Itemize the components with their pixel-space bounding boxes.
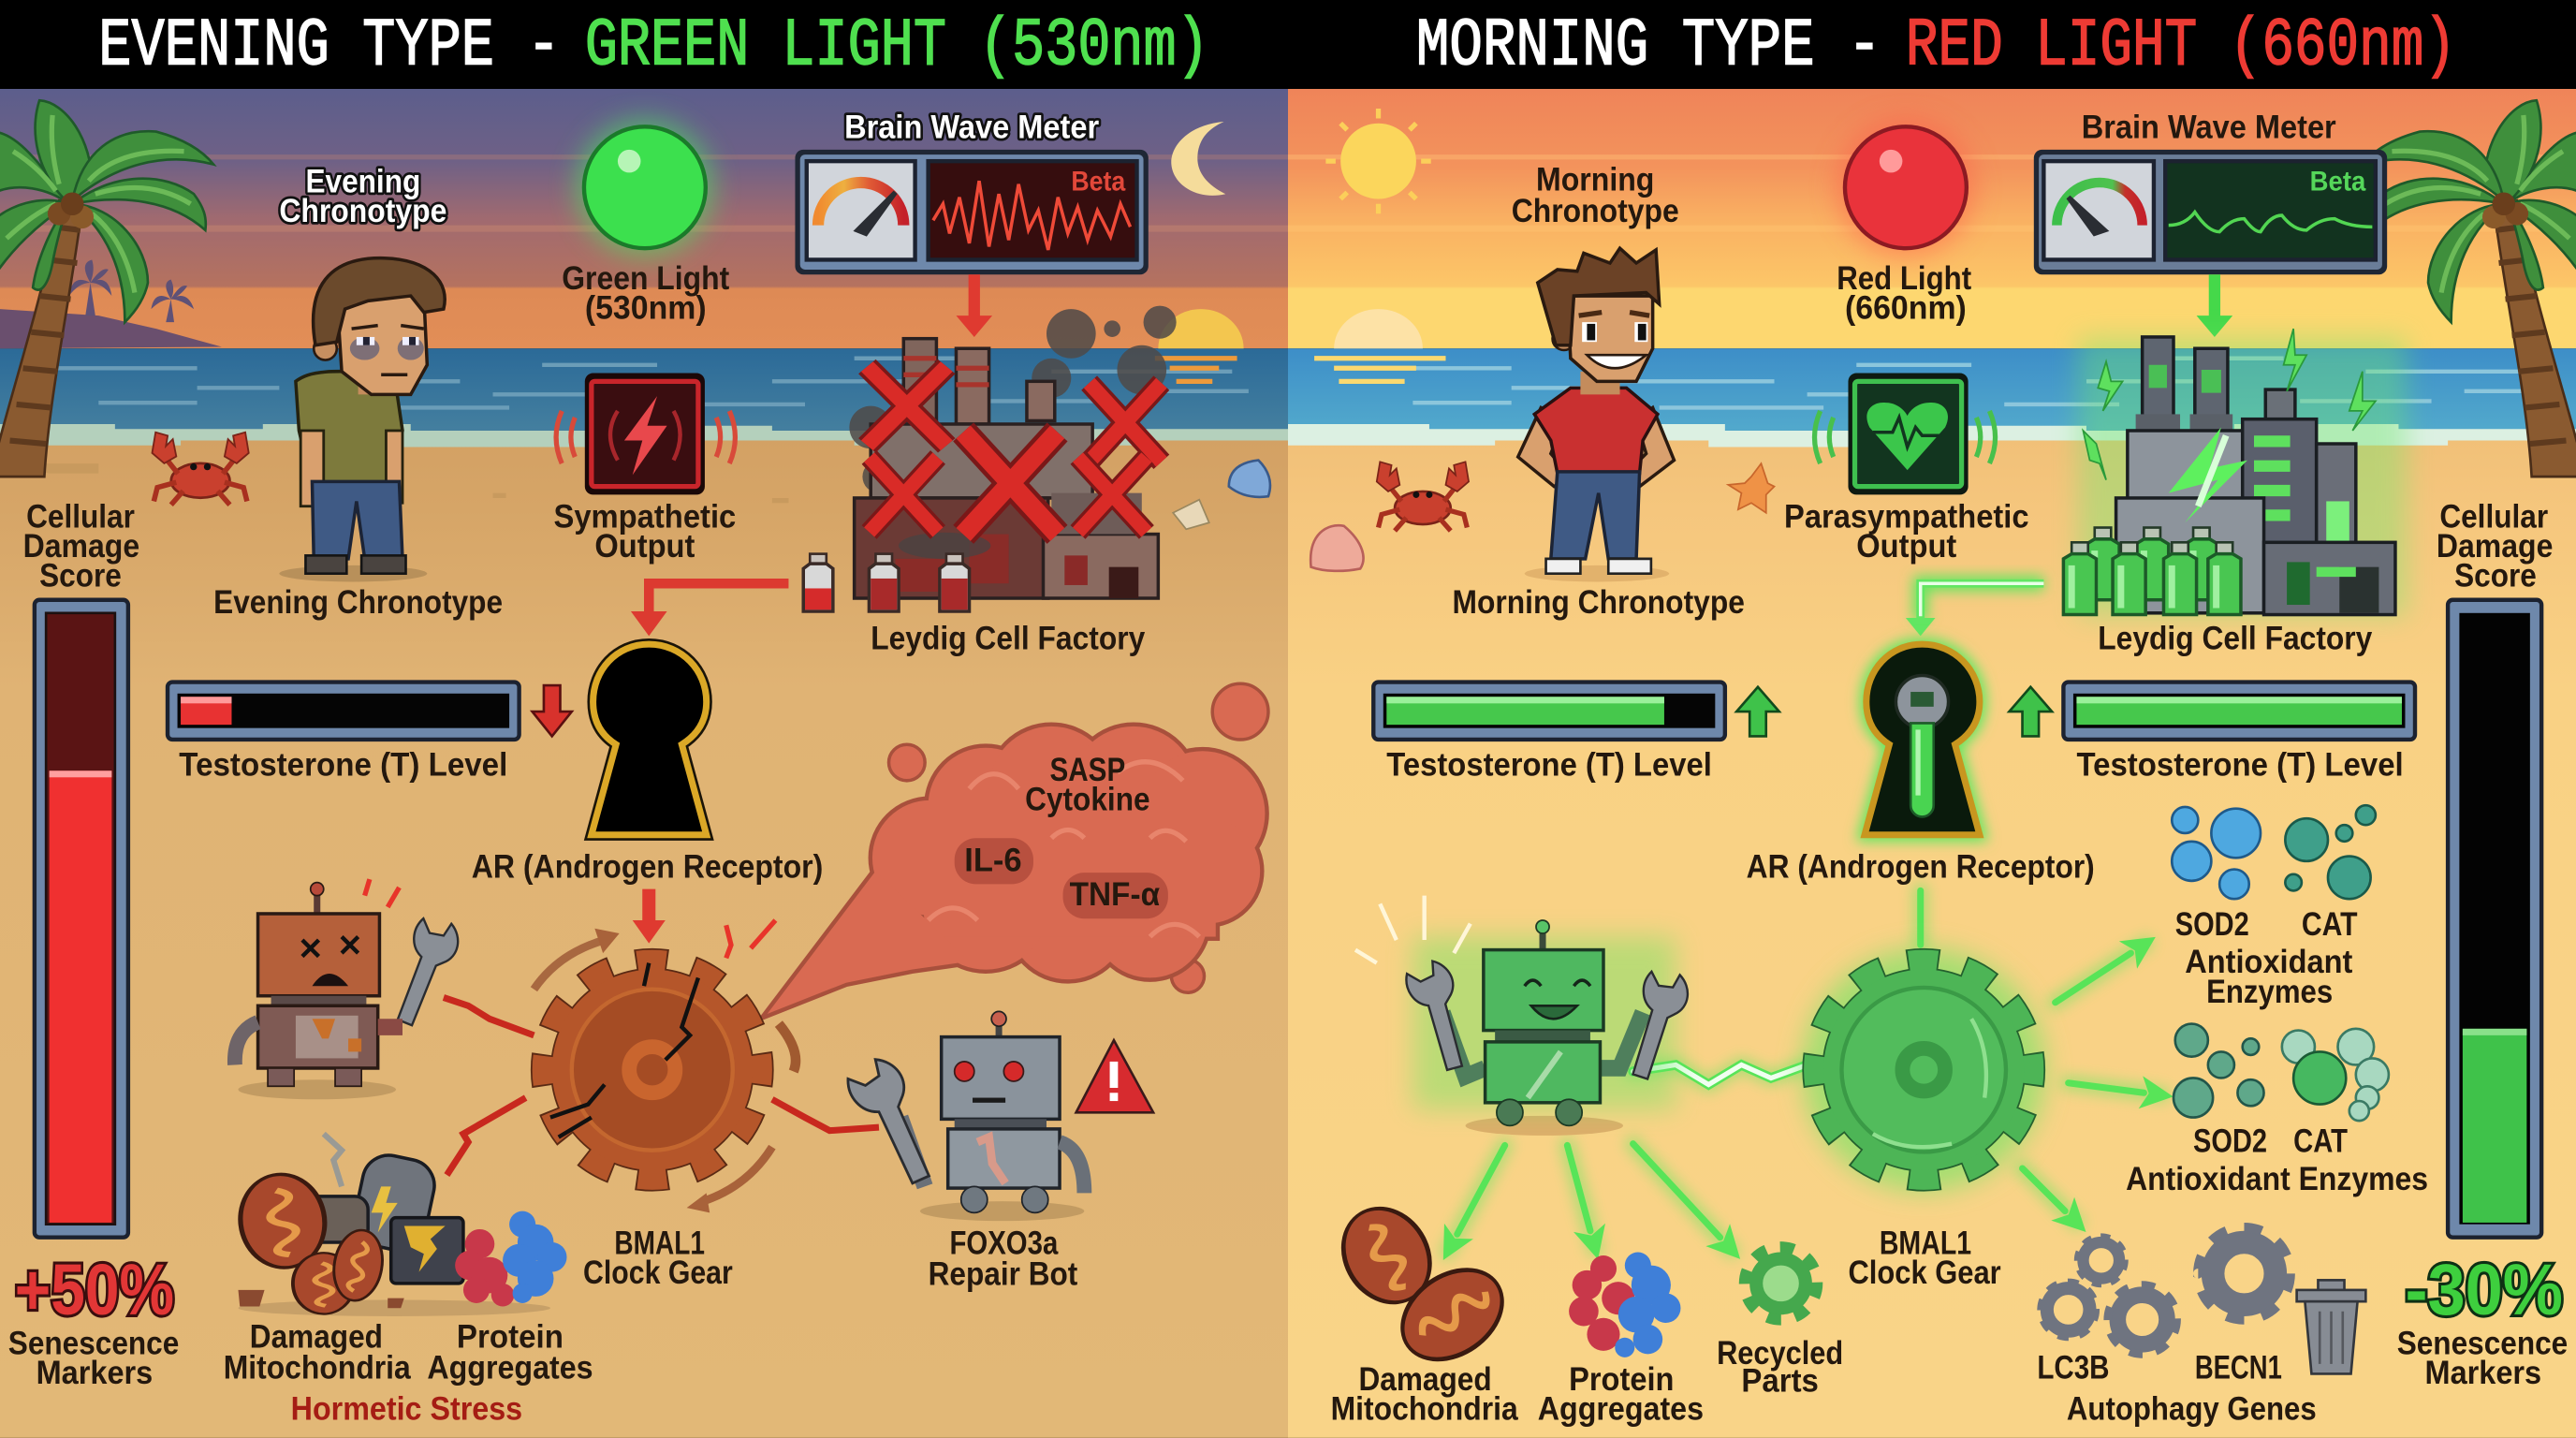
gauge: cellular damage bar left <box>35 600 128 1238</box>
label: brain wave meter evening: Brain Wave Meter <box>844 110 1099 146</box>
label: senescence markers right: Markers <box>2425 1355 2541 1391</box>
arrow: receptor to gear (red) <box>633 889 666 944</box>
icon: recycled gear <box>1747 1249 1815 1318</box>
cloud: SASP cytokine: IL-6 <box>964 842 1022 878</box>
label: androgen receptor evening: AR (Androgen Receptor) <box>472 848 823 885</box>
label: hormetic stress: Hormetic Stress <box>291 1391 522 1428</box>
icon: unlocked keyhole receptor <box>1865 644 1980 835</box>
scene background: evening beach <box>0 89 1288 1438</box>
label: evening chronotype white: Evening <box>305 163 420 199</box>
label: antioxidant group one: SOD2 <box>2175 906 2249 943</box>
label: parasympathetic output <box>1784 499 2029 565</box>
label: parasympathetic output: Output <box>1856 528 1957 565</box>
header bar <box>0 0 2576 89</box>
label: antioxidant group one: Enzymes <box>2206 974 2333 1010</box>
arrow: testosterone down <box>533 685 572 736</box>
arrow: testosterone up (second) <box>2009 687 2052 736</box>
character: broken repair robot <box>235 883 465 1099</box>
cloud: SASP cytokine: Cytokine <box>1025 781 1150 817</box>
arrow: meter to factory (red) <box>956 274 992 337</box>
label: cellular damage score left: Score <box>39 558 122 594</box>
label: cellular damage score right: Damage <box>2437 528 2553 565</box>
label: FOXO3a repair bot: FOXO3a <box>949 1225 1059 1261</box>
character: happy repair robot <box>1355 896 1693 1136</box>
character: FOXO3a repair robot <box>842 1011 1084 1221</box>
arrow: meter to factory (green) <box>2197 274 2232 337</box>
label: leydig factory morning: Leydig Cell Factory <box>2098 620 2373 656</box>
icon: setting sun <box>1155 309 1244 381</box>
gauge: testosterone level low <box>168 682 520 740</box>
label: FOXO3a repair bot: Repair Bot <box>929 1256 1078 1293</box>
icon: mitochondria <box>1326 1192 1519 1378</box>
label: red light: (660nm) <box>1845 290 1967 327</box>
label: androgen receptor morning: AR (Androgen Receptor) <box>1747 848 2095 885</box>
label: cellular damage score right: Score <box>2454 558 2537 594</box>
label: damaged mitochondria morning: Mitochondria <box>1331 1391 1518 1428</box>
label: cellular damage score left: Cellular <box>26 499 135 536</box>
label: BECN1: BECN1 <box>2195 1350 2282 1387</box>
label: morning chronotype top <box>1512 162 1679 229</box>
icon: right palm tree <box>2363 100 2576 477</box>
label: BMAL1 clock gear morning: Clock Gear <box>1848 1255 2001 1291</box>
scene background: morning beach <box>1288 89 2576 1438</box>
label: antioxidant group two: CAT <box>2293 1123 2348 1159</box>
label: BMAL1 clock gear morning <box>1848 1225 2001 1291</box>
label: damaged mitochondria morning <box>1331 1361 1518 1428</box>
icon: parasympathetic heart <box>1815 374 1996 494</box>
label: protein aggregates morning <box>1538 1361 1704 1428</box>
label: antioxidant group two: Antioxidant Enzymes <box>2126 1161 2428 1197</box>
illustration: thriving leydig cell factory <box>2078 329 2407 616</box>
title: evening type: EVENING TYPE - <box>98 8 560 85</box>
title: morning type <box>1416 8 2456 85</box>
label: recycled parts: Parts <box>1741 1363 1819 1400</box>
label: leydig factory evening: Leydig Cell Factory <box>871 620 1146 656</box>
label: sympathetic output <box>553 499 736 565</box>
label: green light: (530nm) <box>585 290 707 327</box>
icon: healthy BMAL1 gear <box>1802 948 2045 1192</box>
label: green light: Green Light <box>562 260 730 297</box>
illustration: damaged mitochondria and protein pile <box>232 1134 567 1316</box>
label: evening chronotype: Evening Chronotype <box>213 584 503 621</box>
illustration: broken leydig cell factory <box>849 306 1177 598</box>
cloud: SASP cytokine: TNF-α <box>1070 876 1161 913</box>
character: morning chronotype <box>1518 248 1674 581</box>
gauge: cellular damage bar right <box>2448 600 2541 1238</box>
icon: locked keyhole receptor <box>592 644 707 835</box>
icon: red vials <box>803 554 970 611</box>
label: cellular damage score left <box>23 499 139 594</box>
label: damaged mitochondria evening: Damaged <box>250 1318 383 1355</box>
label: protein aggregates evening: Aggregates <box>427 1350 593 1387</box>
title: evening type <box>98 8 1209 85</box>
arrow: vials to receptor (red) <box>631 579 788 636</box>
label: protein aggregates morning: Protein <box>1569 1361 1674 1398</box>
island silhouette <box>0 259 222 348</box>
label: recycled parts: Recycled <box>1717 1335 1843 1372</box>
label: green light <box>562 260 730 327</box>
label: antioxidant group one: Antioxidant <box>2185 944 2353 980</box>
label: parasympathetic output: Parasympathetic <box>1784 499 2029 536</box>
icon: CAT bubbles <box>2174 1024 2389 1121</box>
icon: sun on horizon <box>1314 309 1445 381</box>
arrows: green signal pathways <box>1447 890 2162 1253</box>
icon: green light orb <box>576 119 714 257</box>
cloud: SASP cytokine <box>768 683 1268 1014</box>
label: sympathetic output: Output <box>594 528 695 565</box>
label: testosterone level morning (first): Testosterone (T) Level <box>1386 747 1712 784</box>
icon: crescent moon <box>1171 122 1225 196</box>
label: BMAL1 clock gear morning: BMAL1 <box>1880 1225 1971 1261</box>
label: cellular damage score right <box>2437 499 2553 594</box>
panel: brain wave meter morning <box>2034 150 2387 274</box>
label: BMAL1 clock gear evening: Clock Gear <box>583 1255 733 1291</box>
stat: +50%: +50% <box>15 1250 174 1330</box>
title: morning type: MORNING TYPE - <box>1416 8 1881 85</box>
icon: protein aggregate <box>1569 1253 1680 1357</box>
label: antioxidant group one <box>2175 906 2358 1010</box>
icon: sun <box>1325 109 1431 213</box>
icon: starfish <box>1728 463 1775 513</box>
icon: trash can <box>2297 1280 2365 1373</box>
label: testosterone level evening: Testosterone (T) Level <box>179 747 507 784</box>
label: antioxidant group two: SOD2 <box>2193 1123 2267 1159</box>
label: senescence markers left: Markers <box>37 1355 153 1391</box>
label: morning chronotype: Morning Chronotype <box>1453 584 1745 621</box>
label: sympathetic output: Sympathetic <box>553 499 736 536</box>
icon: shells on evening beach <box>1173 461 1270 529</box>
label: autophagy genes: Autophagy Genes <box>2067 1391 2317 1428</box>
icon: cracked BMAL1 gear <box>550 963 754 1172</box>
panel: brain wave meter morning: Beta <box>2310 167 2366 198</box>
illustration: sparks and damage around gear <box>365 879 879 1212</box>
label: morning chronotype top: Morning <box>1536 162 1654 198</box>
arrow: vials to receptor (green) <box>1906 583 2043 636</box>
label: senescence markers left: Senescence <box>8 1325 179 1361</box>
label: protein aggregates morning: Aggregates <box>1538 1391 1704 1428</box>
icon: left palm tree <box>0 100 213 477</box>
icon: autophagy gears <box>2041 1227 2291 1354</box>
arrow: testosterone up (first) <box>1736 687 1779 736</box>
icon: warning triangle <box>1076 1040 1153 1112</box>
label: recycled parts <box>1717 1335 1843 1400</box>
stat: -30%: -30% <box>2405 1250 2563 1330</box>
character: evening chronotype <box>279 258 445 581</box>
label: BMAL1 clock gear evening: BMAL1 <box>614 1225 705 1261</box>
label: damaged mitochondria morning: Damaged <box>1358 1361 1492 1398</box>
label: red light <box>1837 260 1971 327</box>
icon: pink shell <box>1310 525 1364 571</box>
panel: brain wave meter evening: Beta <box>1071 167 1126 198</box>
label: senescence markers left <box>8 1325 179 1391</box>
label: protein aggregates evening <box>427 1318 593 1387</box>
label: damaged mitochondria evening <box>224 1318 411 1387</box>
label: morning chronotype top: Chronotype <box>1512 193 1679 229</box>
label: senescence markers right <box>2397 1325 2568 1391</box>
icon: sympathetic bolt <box>556 374 735 494</box>
panel: brain wave meter evening <box>795 150 1149 274</box>
label: testosterone level morning (second): Testosterone (T) Level <box>2076 747 2404 784</box>
title: morning type: RED LIGHT (660nm) <box>1906 8 2456 85</box>
label: antioxidant group one: CAT <box>2302 906 2358 943</box>
label: FOXO3a repair bot <box>929 1225 1078 1293</box>
icon: green vials <box>2063 528 2241 615</box>
label: LC3B: LC3B <box>2037 1350 2110 1387</box>
icon: red light orb <box>1837 119 1975 257</box>
label: damaged mitochondria evening: Mitochondria <box>224 1350 411 1387</box>
gauge: testosterone level high (second) <box>2063 682 2415 740</box>
cloud: SASP cytokine: SASP <box>1050 752 1125 788</box>
gauge: testosterone level high (first) <box>1373 682 1725 740</box>
icon: crab right <box>1377 462 1469 531</box>
label: cellular damage score left: Damage <box>23 528 139 565</box>
label: brain wave meter morning: Brain Wave Meter <box>2082 110 2336 146</box>
icon: SOD2 bubbles <box>2172 805 2376 899</box>
label: protein aggregates evening: Protein <box>457 1318 564 1355</box>
label: BMAL1 clock gear evening <box>583 1225 733 1291</box>
label: red light: Red Light <box>1837 260 1971 297</box>
title: evening type: GREEN LIGHT (530nm) <box>585 8 1209 85</box>
label: antioxidant group two <box>2126 1123 2428 1197</box>
icon: crab left <box>153 433 249 505</box>
label: evening chronotype white: Chronotype <box>279 193 446 229</box>
label: evening chronotype white <box>279 163 446 229</box>
label: cellular damage score right: Cellular <box>2439 499 2548 536</box>
